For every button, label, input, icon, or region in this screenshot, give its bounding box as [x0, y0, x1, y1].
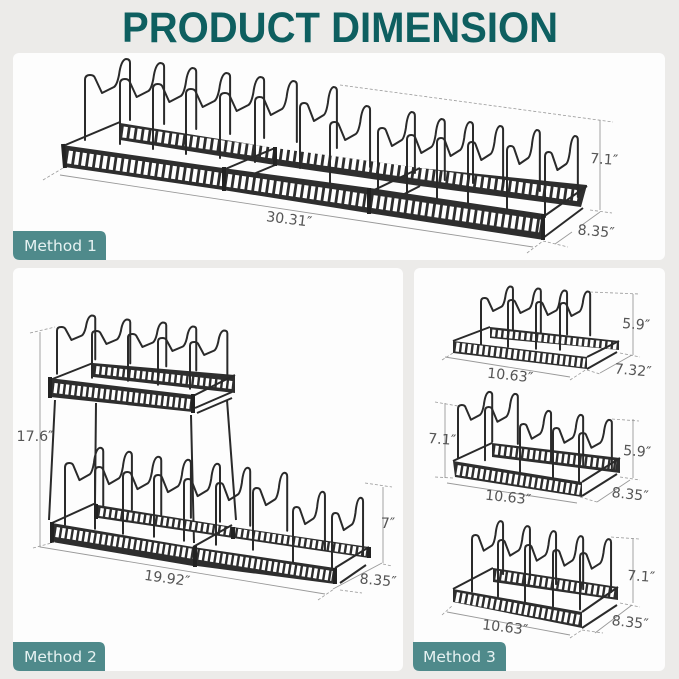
label: 8.35 C: 8.35″ [611, 613, 649, 633]
panel: method 3 [413, 268, 665, 671]
badge: method 2 [13, 642, 105, 671]
label: 5.9 right: 5.9″ [623, 443, 651, 461]
label: 7: 7″ [381, 516, 395, 532]
label: 7.1 left: 7.1″ [428, 431, 456, 449]
rack: configuration C [453, 521, 618, 628]
label: 17.6: 17.6″ [17, 429, 53, 445]
badge: method 3: Method 3 [423, 648, 496, 666]
label: 8.35: 8.35″ [359, 571, 397, 591]
dimension lines: method 2 [30, 327, 392, 600]
label: 7.1: 7.1″ [590, 151, 618, 169]
label: 8.35: 8.35″ [577, 222, 615, 242]
label: 8.35 B: 8.35″ [611, 485, 649, 505]
rack: configuration A [453, 286, 619, 369]
label: 30.31: 30.31″ [265, 209, 313, 231]
dimension lines: configuration B [435, 402, 640, 503]
label: 7.1 C: 7.1″ [627, 568, 655, 586]
dimension lines: method 1 [43, 85, 613, 253]
panel: method 2 [13, 268, 403, 671]
label: 19.92: 19.92″ [143, 568, 191, 590]
label: 10.63 A: 10.63″ [486, 366, 534, 386]
rack: method 1 [62, 59, 587, 240]
label: 10.63 B: 10.63″ [484, 488, 532, 508]
badge: method 3 [413, 642, 506, 671]
dimension lines: configuration A [442, 292, 640, 380]
rack: method 2 [49, 315, 369, 584]
badge: method 2: Method 2 [24, 648, 97, 666]
panel: method 1 [13, 53, 665, 260]
label: 5.9 top: 5.9″ [622, 316, 650, 334]
label: 10.63 C: 10.63″ [481, 617, 529, 639]
dimension lines: configuration C [442, 537, 640, 638]
badge: method 1 [13, 231, 106, 260]
badge: method 1: Method 1 [24, 237, 97, 255]
label: 7.32: 7.32″ [614, 361, 652, 381]
rack: configuration B [453, 392, 620, 497]
title: PRODUCT DIMENSION [122, 4, 558, 52]
